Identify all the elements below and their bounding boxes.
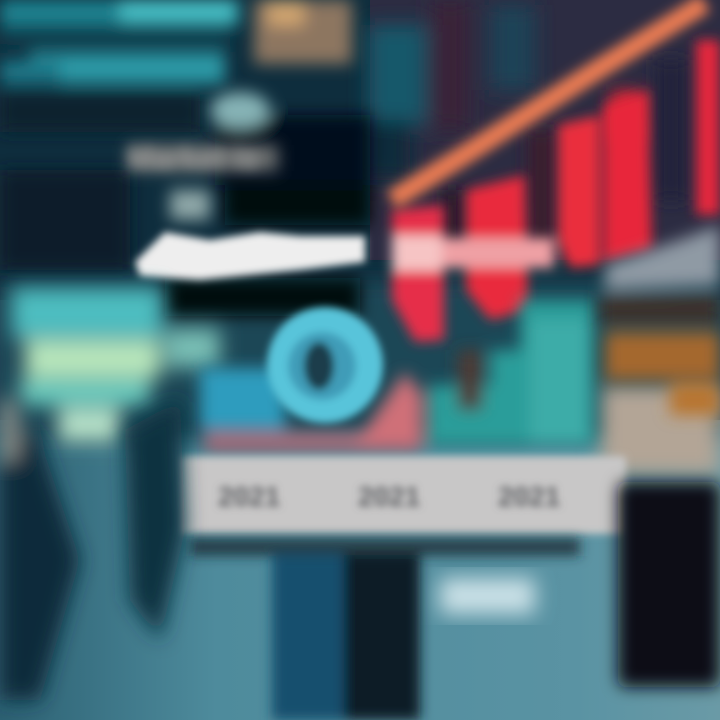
blurred heading text: Market is	[128, 142, 258, 175]
shop counter, right	[600, 225, 720, 415]
teal awning stripes, top left	[0, 0, 240, 270]
figures below the bar	[190, 538, 580, 720]
white floor patch, lower right	[440, 578, 535, 614]
year labels: 2021	[498, 481, 560, 512]
dark central figure	[165, 92, 370, 316]
red banners	[392, 40, 720, 342]
orange diagonal trend line	[392, 3, 705, 200]
year labels: 2021	[218, 481, 280, 512]
black case, lower right	[618, 482, 720, 687]
year labels: 2021	[358, 481, 420, 512]
year labels	[218, 481, 560, 512]
blurred heading text	[128, 142, 365, 280]
pale green chart panel, left	[12, 288, 220, 442]
pedestrian silhouettes, left	[0, 400, 185, 700]
donut chart	[267, 307, 383, 423]
grey year label bar	[180, 456, 626, 534]
teal storefront, top centre	[360, 0, 535, 180]
bar chart with donut	[200, 300, 594, 452]
tan sign, top centre	[254, 0, 352, 64]
